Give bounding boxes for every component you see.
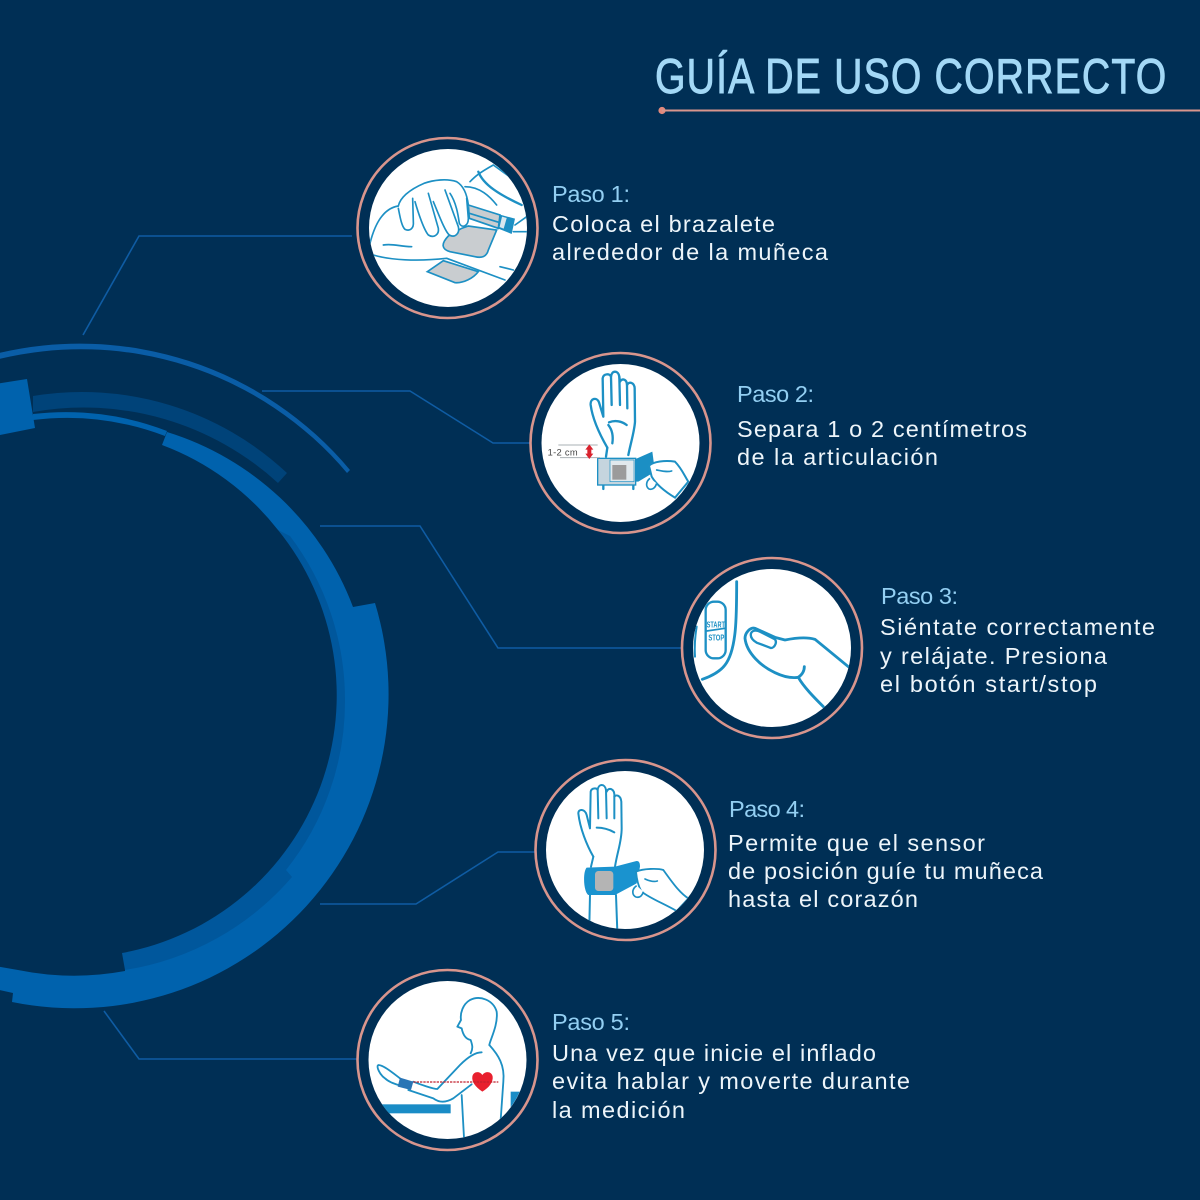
text: step 2: Separa 1 o 2 centímetros [737,416,1027,442]
decorative concentric ring graphic [0,344,389,1008]
text: step 5: Una vez que inicie el inflado [552,1040,876,1066]
text: step 4: de posición guíe tu muñeca [728,858,1044,884]
text: step 1 [552,181,829,265]
text: step 1: Paso 1: [552,181,630,207]
panel: step 1 [358,138,829,318]
icon: finger pressing start/stop button: START [707,619,725,629]
text: step 4: Paso 4: [729,796,805,822]
icon: finger pressing start/stop button [695,582,848,707]
text: step 1: Coloca el brazalete [552,211,775,237]
panel: step 5 [358,970,910,1150]
icon: cuff placed 1-2 cm from the wrist joint: 1-2 cm [548,447,578,457]
icon: position sensor on the wrist [578,785,688,932]
icon: cuff placed 1-2 cm from the wrist joint [548,372,688,498]
title: GUÍA DE USO CORRECTO [655,50,1166,104]
icon: seated person with wrist at heart level [377,998,527,1138]
text: step 2: Paso 2: [737,381,814,407]
panel: step 3 [682,558,1155,738]
text: step 5: evita hablar y moverte durante [552,1068,910,1094]
text: step 3: el botón start/stop [880,671,1097,697]
text: step 2 [737,381,1027,470]
connector lines [83,236,683,1059]
text: step 4 [728,796,1044,912]
panel: step 4 [536,760,1044,940]
text: step 2: de la articulación [737,444,938,470]
text: step 4: Permite que el sensor [728,830,985,856]
text: step 3: y relájate. Presiona [880,643,1108,669]
text: step 3 [880,583,1155,697]
text: step 4: hasta el corazón [728,886,918,912]
text: step 5: la medición [552,1097,685,1123]
icon: fitting the cuff around the wrist [370,165,527,283]
text: step 5 [552,1009,910,1123]
text: step 3: Siéntate correctamente [880,614,1155,640]
icon: finger pressing start/stop button: STOP [708,632,725,642]
text: step 5: Paso 5: [552,1009,630,1035]
text: step 3: Paso 3: [881,583,958,609]
text: step 1: alrededor de la muñeca [552,239,829,265]
panel: step 2 [530,353,1027,533]
